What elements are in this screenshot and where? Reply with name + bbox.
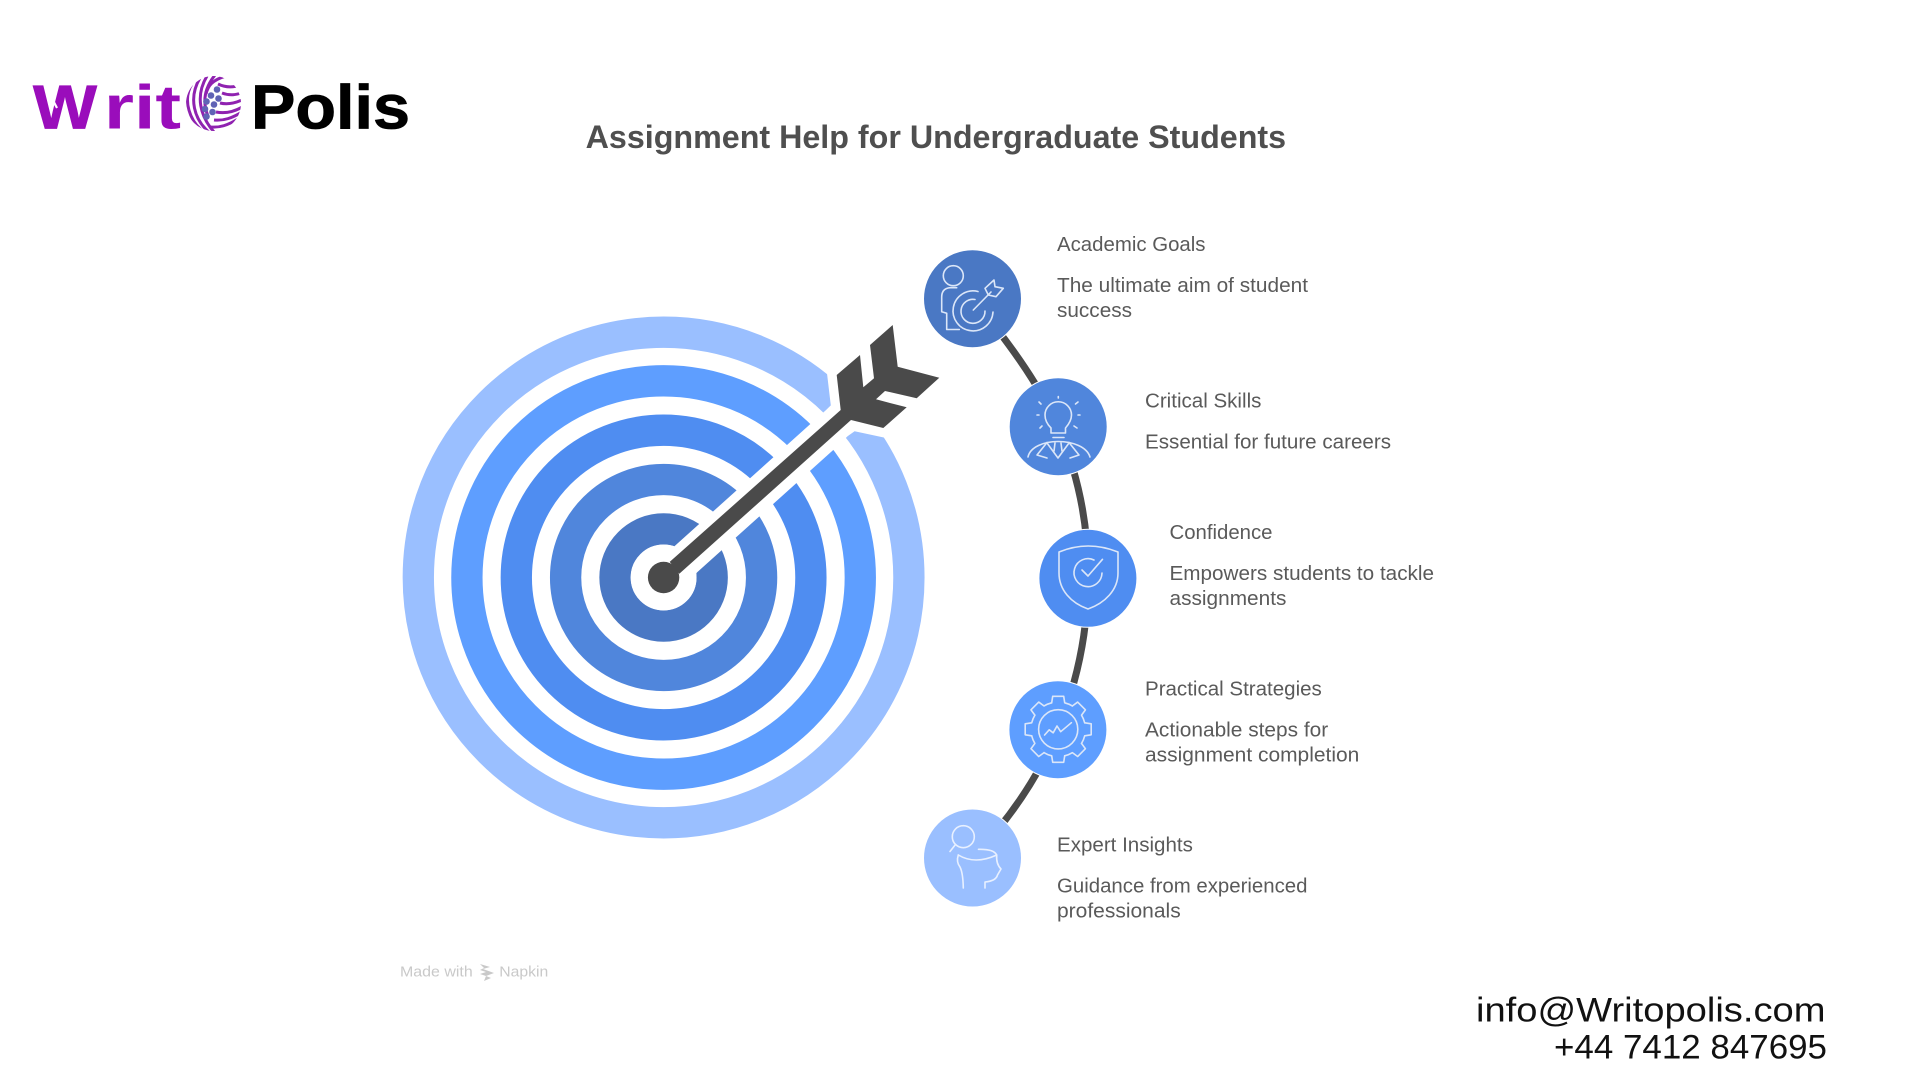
- label: Practical Strategies: [1145, 678, 1359, 766]
- label: Practical Strategies: assignment completion: [1145, 744, 1359, 766]
- icon: head with magnifier: [950, 826, 1001, 888]
- icon: person with target: [942, 266, 1003, 331]
- node: Academic Goals: [924, 250, 1022, 348]
- icon: logo globe: [188, 75, 244, 133]
- logo word: Writ: W: [33, 74, 98, 142]
- label: Critical Skills: [1145, 390, 1391, 454]
- node: Critical Skills: [1009, 378, 1107, 476]
- logo word: Writ: rit: [104, 74, 181, 142]
- label: Academic Goals: The ultimate aim of student: [1057, 275, 1308, 297]
- connector arc: [972, 299, 1088, 858]
- label: Confidence: Empowers students to tackle: [1170, 563, 1434, 585]
- icon: gear with chart: [1025, 696, 1092, 763]
- watermark: Made with Napkin: [400, 964, 548, 981]
- icon: shield with check: [1059, 546, 1118, 609]
- logo word: Polis: Polis: [251, 74, 410, 142]
- label: Confidence: assignments: [1170, 588, 1286, 610]
- node: Expert Insights: [924, 809, 1022, 907]
- logo: WritoPolis: [32, 76, 408, 131]
- watermark: Made with Napkin: Made with: [400, 964, 473, 981]
- label: Academic Goals: success: [1057, 300, 1132, 322]
- label: Expert Insights: professionals: [1057, 900, 1181, 922]
- label: Expert Insights: [1057, 834, 1308, 922]
- label: Critical Skills: Essential for future careers: [1145, 432, 1391, 454]
- icon: napkin mark: [480, 964, 494, 981]
- label: Academic Goals: [1057, 234, 1308, 322]
- contact details: [1476, 992, 1827, 1066]
- arrow clearance: [663, 330, 945, 590]
- title: Assignment Help for Undergraduate Students: [586, 119, 1286, 155]
- label: Expert Insights: Expert Insights: [1057, 834, 1193, 856]
- node: Practical Strategies: [1009, 681, 1107, 779]
- label: Critical Skills: Critical Skills: [1145, 390, 1261, 412]
- target with arrow: [418, 325, 945, 823]
- watermark: Made with Napkin: Napkin: [499, 964, 548, 981]
- logo word: Writ: [33, 74, 181, 142]
- label: Confidence: [1170, 522, 1434, 610]
- node: Confidence: [1039, 529, 1137, 627]
- label: Academic Goals: Academic Goals: [1057, 234, 1206, 256]
- label: Confidence: Confidence: [1170, 522, 1272, 544]
- label: Practical Strategies: Actionable steps for: [1145, 720, 1329, 742]
- arrow: [648, 325, 939, 593]
- label: Expert Insights: Guidance from experienced: [1057, 876, 1308, 898]
- contact details: info@Writopolis.com: [1476, 992, 1826, 1030]
- icon: lightbulb over person: [1028, 396, 1090, 458]
- label: Practical Strategies: Practical Strategies: [1145, 678, 1322, 700]
- target rings: [418, 332, 909, 823]
- contact details: +44 7412 847695: [1554, 1028, 1827, 1066]
